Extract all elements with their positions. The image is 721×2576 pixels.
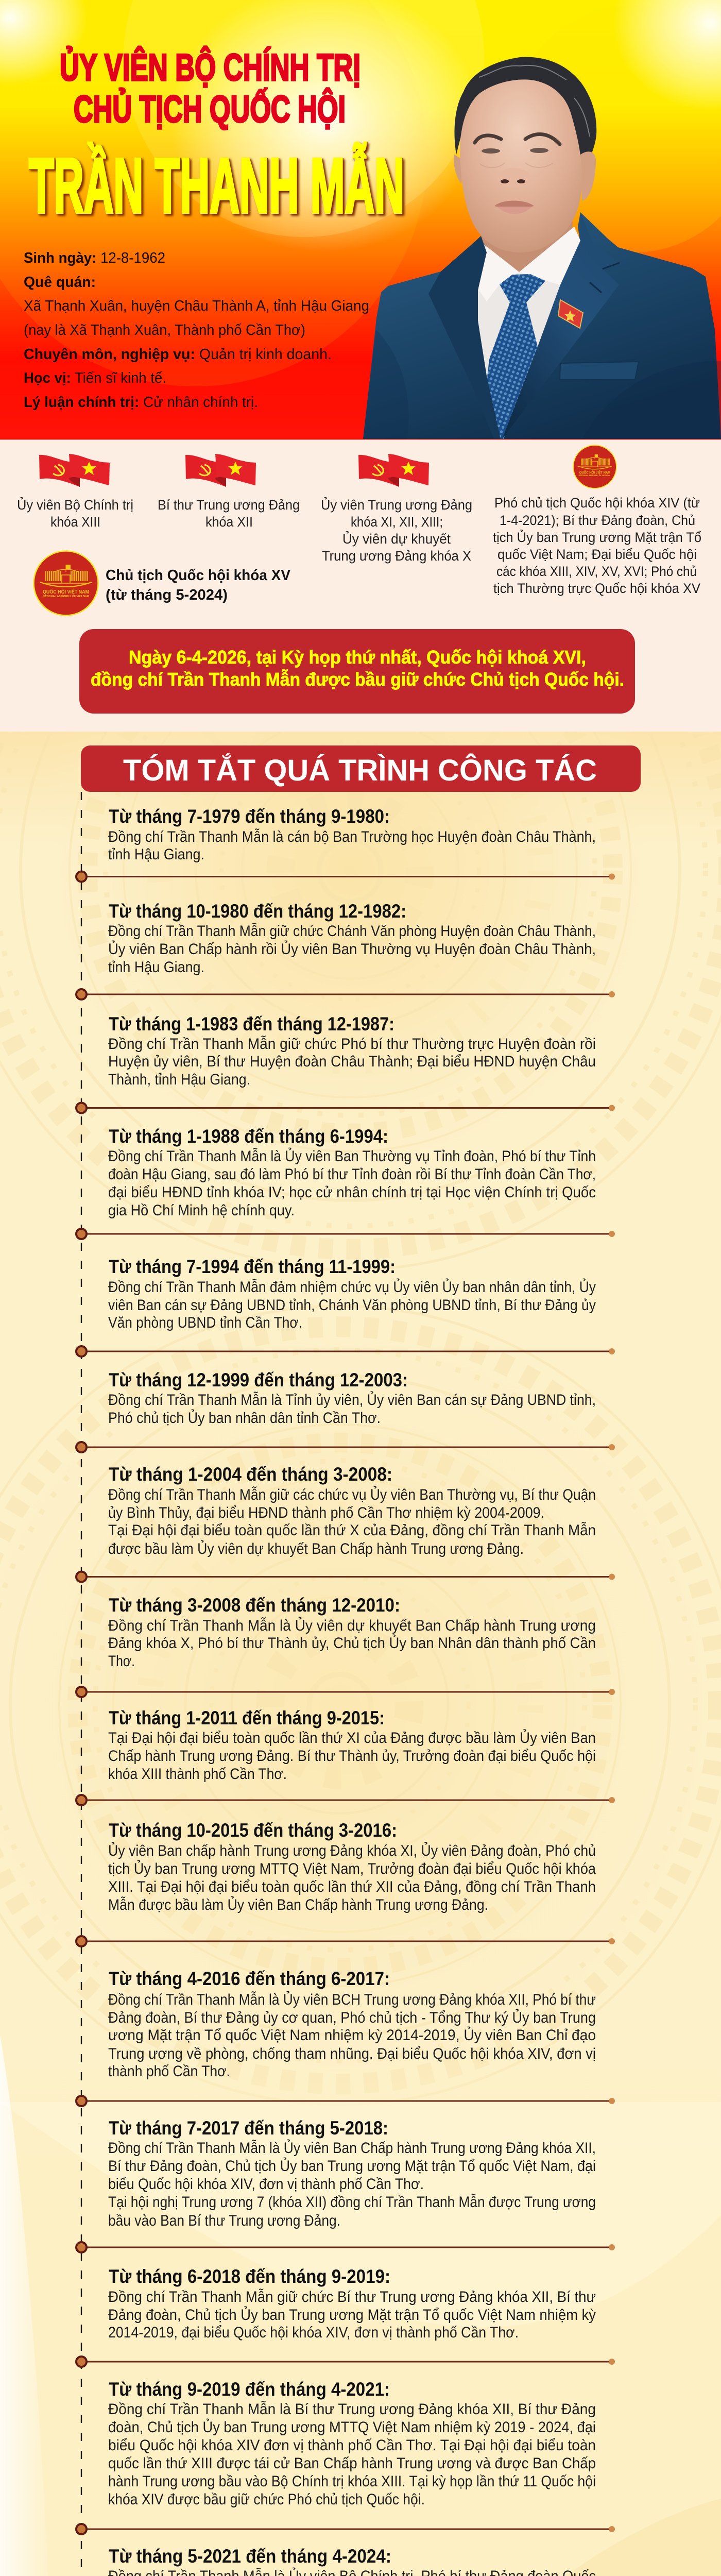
timeline entry: 12-1999 to 12-2003 xyxy=(108,1369,596,1427)
timeline entry: 7-1994 to 11-1999: Đồng chí Trần Thanh Mẫn đảm nhiệm chức vụ Ủy viên Ủy ban nhân dân tỉnh, Ủy xyxy=(108,1278,596,1296)
label: khóa XI, XII, XIII; xyxy=(351,514,443,530)
timeline entry: 9-2019 to 4-2021 xyxy=(108,2379,596,2508)
label: Ủy viên Trung ương Đảng xyxy=(321,496,472,513)
text block: personal details: Sinh ngày: 12-8-1962 xyxy=(24,250,165,266)
label: Trung ương Đảng khóa X xyxy=(322,548,471,564)
portrait: shirt xyxy=(478,227,580,439)
timeline entry: 10-1980 to 12-1982: tỉnh Hậu Giang. xyxy=(108,959,204,976)
timeline entry: 10-2015 to 3-2016: Mẫn được bầu làm Ủy viên Ban Chấp hành Trung ương Đảng. xyxy=(108,1896,488,1913)
timeline entry: 1-1983 to 12-1987: Đồng chí Trần Thanh Mẫn giữ chức Phó bí thư Thường trực Huyện đoàn rồi xyxy=(108,1036,596,1053)
timeline entry: 4-2016 to 6-2017: Đảng đoàn, Bí thư Đảng ủy cơ quan, Phó chủ tịch - Tổng Thư ký Ủy ban Trung xyxy=(108,2009,596,2026)
timeline entry: 4-2016 to 6-2017: ương Mặt trận Tổ quốc Việt Nam nhiệm kỳ 2014-2019, Ủy viên Ban Chỉ đạo xyxy=(108,2026,596,2044)
timeline entry: 4-2016 to 6-2017: Từ tháng 4-2016 đến tháng 6-2017: xyxy=(109,1968,390,1989)
label: tịch Thường trực Quốc hội khóa XV xyxy=(493,581,700,596)
timeline entry: 10-1980 to 12-1982 xyxy=(108,901,596,976)
timeline entry: 7-1979 to 9-1980: Đồng chí Trần Thanh Mẫn là cán bộ Ban Trường học Huyện đoàn Châu Thành, xyxy=(108,828,596,845)
timeline entry: 3-2008 to 12-2010: Đảng khóa X, Phó bí thư Thành ủy, Chủ tịch Ủy ban Nhân dân thành phố Cần xyxy=(108,1634,596,1652)
timeline entry: 10-2015 to 3-2016: Ủy viên Ban chấp hành Trung ương Đảng khóa XI, Ủy viên Đảng đoàn, Phó chủ xyxy=(108,1842,596,1859)
timeline entry: 9-2019 to 4-2021: Từ tháng 9-2019 đến tháng 4-2021: xyxy=(109,2379,390,2400)
timeline entry: 6-2018 to 9-2019: Từ tháng 6-2018 đến tháng 9-2019: xyxy=(109,2266,390,2287)
timeline entry: 3-2008 to 12-2010: Đồng chí Trần Thanh Mẫn là Ủy viên dự khuyết Ban Chấp hành Trung ương xyxy=(108,1617,596,1634)
timeline entry: 1-2004 to 3-2008: ủy Bình Thủy, đại biểu HĐND thành phố Cần Thơ nhiệm kỳ 2004-2009. xyxy=(108,1504,544,1521)
timeline marker xyxy=(76,1936,615,1946)
heading band: career summary: TÓM TẮT QUÁ TRÌNH CÔNG TÁC xyxy=(123,754,597,787)
label: Ủy viên Bộ Chính trị xyxy=(17,496,133,513)
timeline entry: 1-1988 to 6-1994 xyxy=(108,1126,596,1219)
label: khóa XIII xyxy=(50,514,100,530)
timeline entry: 10-1980 to 12-1982: Đồng chí Trần Thanh Mẫn giữ chức Chánh Văn phòng Huyện đoàn Châu Thành, xyxy=(108,923,596,940)
label: Ủy viên dự khuyết xyxy=(342,530,451,547)
timeline entry: 1-1983 to 12-1987 xyxy=(108,1013,596,1088)
timeline marker xyxy=(76,1795,615,1805)
timeline entry: 1-2004 to 3-2008: Đồng chí Trần Thanh Mẫn giữ các chức vụ Ủy viên Ban Thường vụ, Bí thư Quận xyxy=(108,1486,596,1503)
portrait: neck xyxy=(479,222,573,273)
timeline entry: 1-1983 to 12-1987: Từ tháng 1-1983 đến tháng 12-1987: xyxy=(109,1013,394,1035)
timeline marker xyxy=(76,2242,615,2252)
icon: party and national flags xyxy=(185,454,256,487)
text block: personal details: Quê quán: xyxy=(24,274,96,291)
timeline entry: 10-1980 to 12-1982: Từ tháng 10-1980 đến tháng 12-1982: xyxy=(109,901,406,922)
timeline marker xyxy=(76,2524,615,2534)
timeline entry: 12-1999 to 12-2003: Từ tháng 12-1999 đến tháng 12-2003: xyxy=(109,1369,408,1391)
timeline entry: 7-2017 to 5-2018: Tại hội nghị Trung ương 7 (khóa XII) đồng chí Trần Thanh Mẫn được Trung ương xyxy=(108,2194,596,2211)
label xyxy=(17,496,133,530)
icon: National Assembly emblem small xyxy=(573,445,616,488)
timeline marker xyxy=(76,1103,615,1113)
timeline entry: 7-1994 to 11-1999: viên Ban cán sự Đảng UBND tỉnh, Chánh Văn phòng UBND tỉnh, Bí thư Đảng ủy xyxy=(108,1297,596,1314)
item: National Assembly vice chairman xyxy=(493,445,701,596)
timeline entry: 9-2019 to 4-2021: đoàn, Chủ tịch Ủy ban Trung ương MTTQ Việt Nam nhiệm kỳ 2019 - 2024, đại xyxy=(108,2418,596,2436)
icon: National Assembly emblem large xyxy=(34,551,98,615)
item: Party Secretariat xyxy=(158,454,300,530)
timeline entry: 9-2019 to 4-2021: khóa XIV được bầu giữ chức Phó chủ tịch Quốc hội. xyxy=(108,2491,425,2508)
timeline entry: 5-2021 to 4-2024: Từ tháng 5-2021 đến tháng 4-2024: xyxy=(109,2546,391,2567)
timeline entry: 1-2011 to 9-2015: Chấp hành Trung ương Đảng. Bí thư Thành ủy, Trưởng đoàn đại biểu Quốc hội xyxy=(108,1748,596,1765)
timeline entry: 7-1994 to 11-1999 xyxy=(108,1256,596,1331)
portrait: tie xyxy=(487,274,545,439)
timeline entry: 9-2019 to 4-2021: Đồng chí Trần Thanh Mẫn là Bí thư Trung ương Đảng khóa XII, Bí thư Đảng xyxy=(108,2401,596,2418)
timeline entry: 1-1988 to 6-1994: Đồng chí Trần Thanh Mẫn là Ủy viên Ban Thường vụ Tỉnh đoàn, Phó bí thư Tỉnh xyxy=(108,1147,596,1165)
timeline entry: 1-2011 to 9-2015: Tại Đại hội đại biểu toàn quốc lần thứ XI của Đảng được bầu làm Ủy viên Ban xyxy=(108,1729,596,1747)
label xyxy=(106,567,291,603)
callout: election announcement: Ngày 6-4-2026, tại Kỳ họp thứ nhất, Quốc hội khoá XVI, xyxy=(129,647,586,668)
timeline entry: 7-2017 to 5-2018: Từ tháng 7-2017 đến tháng 5-2018: xyxy=(109,2117,388,2139)
timeline entry: 1-2011 to 9-2015 xyxy=(108,1707,596,1783)
item: Politburo member xyxy=(17,454,133,530)
timeline entry: 1-1988 to 6-1994: gia Hồ Chí Minh hệ chính quy. xyxy=(108,1202,295,1219)
timeline entry: 7-2017 to 5-2018: biểu Quốc hội khóa XIV, đơn vị thành phố Cần Thơ. xyxy=(108,2176,424,2193)
label: Bí thư Trung ương Đảng xyxy=(158,497,300,513)
label: (từ tháng 5-2024) xyxy=(106,587,228,603)
timeline entry: 6-2018 to 9-2019 xyxy=(108,2266,596,2341)
label: tịch Ủy ban Trung ương Mặt trận Tổ xyxy=(493,529,701,545)
text block: personal details: Xã Thạnh Xuân, huyện Châu Thành A, tỉnh Hậu Giang xyxy=(24,298,369,314)
timeline entry: 4-2016 to 6-2017 xyxy=(108,1968,596,2080)
text block: personal details: Học vị: Tiến sĩ kinh tế. xyxy=(24,370,166,386)
timeline entry: 12-1999 to 12-2003: Đồng chí Trần Thanh Mẫn là Tỉnh ủy viên, Ủy viên Ban cán sự Đảng UBND tỉnh, xyxy=(108,1391,596,1409)
icon: party and national flags xyxy=(39,454,110,487)
timeline entry: 4-2016 to 6-2017: Trung ương về phòng, chống tham nhũng. Đại biểu Quốc hội khóa XIV, đơn vị xyxy=(108,2045,596,2062)
timeline entry: 6-2018 to 9-2019: Đảng đoàn, Chủ tịch Ủy ban Trung ương Mặt trận Tổ quốc Việt Nam nhiệm kỳ xyxy=(108,2306,596,2324)
timeline entry: 1-2004 to 3-2008: được bầu làm Ủy viên dự khuyết Ban Chấp hành Trung ương Đảng. xyxy=(108,1540,524,1557)
timeline entry: 1-2004 to 3-2008 xyxy=(108,1464,596,1557)
text block: personal details: Chuyên môn, nghiệp vụ: Quản trị kinh doanh. xyxy=(24,346,332,363)
timeline marker xyxy=(76,2096,615,2106)
panel: hero header xyxy=(0,0,721,440)
timeline marker xyxy=(76,1229,615,1239)
timeline entry: 3-2008 to 12-2010: Từ tháng 3-2008 đến tháng 12-2010: xyxy=(109,1595,400,1616)
heading: position title xyxy=(60,47,360,130)
timeline entry: 10-1980 to 12-1982: Ủy viên Ban Chấp hành rồi Ủy viên Ban Thường vụ Huyện đoàn Châu Thành, xyxy=(108,940,596,958)
text block: personal details: Lý luận chính trị: Cử nhân chính trị. xyxy=(24,394,258,411)
timeline entry: 3-2008 to 12-2010: Thơ. xyxy=(108,1653,135,1670)
timeline entry: 9-2019 to 4-2021: biểu Quốc hội khóa XIV đơn vị thành phố Cần Thơ. Tại Đại hội đại biểu toàn xyxy=(108,2437,596,2454)
timeline entry: 1-1988 to 6-1994: Từ tháng 1-1988 đến tháng 6-1994: xyxy=(109,1126,388,1147)
heading: name: TRẦN THANH MẪN xyxy=(29,142,404,229)
heading band: career summary xyxy=(81,745,641,792)
portrait: head xyxy=(454,57,596,252)
heading: position title: CHỦ TỊCH QUỐC HỘI xyxy=(74,88,346,130)
timeline entry: 4-2016 to 6-2017: Đồng chí Trần Thanh Mẫn là Ủy viên BCH Trung ương Đảng khóa XII, Phó bí thư xyxy=(108,1991,596,2008)
timeline entry: 1-2011 to 9-2015: khóa XIII thành phố Cần Thơ. xyxy=(108,1766,287,1783)
timeline entry: 10-2015 to 3-2016: XIII. Tại Đại hội đại biểu toàn quốc lần thứ XII của Đảng, đồng chí Trần Thanh xyxy=(108,1878,596,1895)
timeline entry: 3-2008 to 12-2010 xyxy=(108,1595,596,1670)
timeline entry: 5-2021 to 4-2024 xyxy=(108,2546,596,2576)
timeline marker xyxy=(76,1442,615,1452)
callout: election announcement xyxy=(79,629,635,714)
portrait: breast pocket xyxy=(560,362,639,380)
timeline entry: 7-2017 to 5-2018: bầu vào Ban Bí thư Trung ương Đảng. xyxy=(108,2212,340,2229)
label: khóa XII xyxy=(205,514,253,530)
panel: positions held xyxy=(0,440,721,732)
timeline entry: 10-2015 to 3-2016: Từ tháng 10-2015 đến tháng 3-2016: xyxy=(109,1820,397,1841)
label xyxy=(493,495,701,596)
timeline marker xyxy=(76,1687,615,1697)
label: quốc Việt Nam; Đại biểu Quốc hội xyxy=(497,547,697,562)
timeline entry: 9-2019 to 4-2021: hành Trung ương bầu vào Bộ Chính trị khóa XIII. Tại kỳ họp lần thứ 11 Quốc hội xyxy=(108,2473,596,2490)
timeline entry: 12-1999 to 12-2003: Phó chủ tịch Ủy ban nhân dân tỉnh Cần Thơ. xyxy=(108,1409,381,1427)
timeline marker xyxy=(76,872,615,882)
timeline entry: 1-2004 to 3-2008: Từ tháng 1-2004 đến tháng 3-2008: xyxy=(109,1464,392,1485)
timeline spine xyxy=(81,792,82,2576)
portrait: collar xyxy=(479,227,580,301)
portrait xyxy=(363,57,721,439)
text block: personal details: (nay là Xã Thạnh Xuân, Thành phố Cần Thơ) xyxy=(24,322,305,338)
timeline entry: 9-2019 to 4-2021: quốc lần thứ XIII được tái cử Ban Chấp hành Trung ương và được Ban Chấp xyxy=(108,2455,596,2472)
timeline entry: 7-1979 to 9-1980 xyxy=(108,806,596,863)
timeline entry: 1-2011 to 9-2015: Từ tháng 1-2011 đến tháng 9-2015: xyxy=(109,1707,385,1728)
timeline marker xyxy=(76,2357,615,2367)
label xyxy=(158,497,300,530)
text block: personal details xyxy=(24,250,369,411)
label xyxy=(321,496,472,564)
timeline entry: 7-2017 to 5-2018: Đồng chí Trần Thanh Mẫn là Ủy viên Ban Chấp hành Trung ương Đảng khóa XII, xyxy=(108,2139,596,2157)
panel: patterned background xyxy=(0,732,721,2576)
timeline entry: 6-2018 to 9-2019: Đồng chí Trần Thanh Mẫn giữ chức Bí thư Trung ương Đảng khóa XII, Bí thư xyxy=(108,2289,596,2306)
callout: election announcement: đồng chí Trần Thanh Mẫn được bầu giữ chức Chủ tịch Quốc hội. xyxy=(91,669,624,690)
timeline marker xyxy=(76,989,615,999)
label: 1-4-2021); Bí thư Đảng đoàn, Chủ xyxy=(500,513,695,528)
timeline entry: 4-2016 to 6-2017: thành phố Cần Thơ. xyxy=(108,2063,230,2080)
timeline entry: 10-2015 to 3-2016 xyxy=(108,1820,596,1913)
timeline entry: 1-1983 to 12-1987: Thành, tỉnh Hậu Giang. xyxy=(108,1071,250,1088)
timeline entry: 7-2017 to 5-2018: Bí thư Đảng đoàn, Chủ tịch Ủy ban Trung ương Mặt trận Tổ quốc Việt Nam, đại xyxy=(108,2157,596,2175)
timeline entry: 1-1983 to 12-1987: Huyện ủy viên, Bí thư Huyện đoàn Châu Thành; Đại biểu HĐND huyện Châu xyxy=(108,1053,596,1070)
portrait: lapel pin xyxy=(558,300,583,328)
portrait: lapels xyxy=(428,212,620,439)
timeline entry: 1-2004 to 3-2008: Tại Đại hội đại biểu toàn quốc lần thứ X của Đảng, đồng chí Trần Thanh Mẫn xyxy=(108,1522,596,1539)
timeline entry: 7-1994 to 11-1999: Từ tháng 7-1994 đến tháng 11-1999: xyxy=(109,1256,396,1277)
timeline entry: 7-1994 to 11-1999: Văn phòng UBND tỉnh Cần Thơ. xyxy=(108,1314,302,1331)
heading: position title: ỦY VIÊN BỘ CHÍNH TRỊ xyxy=(60,47,360,89)
item: Central Committee member xyxy=(321,454,472,564)
timeline entry: 7-1979 to 9-1980: tỉnh Hậu Giang. xyxy=(108,846,204,863)
item: National Assembly chairman xyxy=(34,551,291,615)
label: các khóa XIII, XIV, XV, XVI; Phó chủ xyxy=(496,564,697,579)
timeline entry: 1-1988 to 6-1994: đoàn Hậu Giang, sau đó làm Phó bí thư Tỉnh đoàn rồi Bí thư Tỉnh đoàn Cần Thơ, xyxy=(108,1166,596,1183)
timeline entry: 7-1979 to 9-1980: Từ tháng 7-1979 đến tháng 9-1980: xyxy=(109,806,390,827)
timeline marker xyxy=(76,1346,615,1357)
timeline entry: 10-2015 to 3-2016: tịch Ủy ban Trung ương MTTQ Việt Nam, Trưởng đoàn đại biểu Quốc hội khóa xyxy=(108,1860,596,1877)
icon: party and national flags xyxy=(358,454,429,487)
label: Chủ tịch Quốc hội khóa XV xyxy=(106,567,291,584)
timeline marker xyxy=(76,1571,615,1582)
timeline entry: 6-2018 to 9-2019: 2014-2019, đại biểu Quốc hội khóa XIV, đơn vị thành phố Cần Thơ. xyxy=(108,2324,519,2341)
label: Phó chủ tịch Quốc hội khóa XIV (từ xyxy=(494,495,700,511)
portrait: jacket xyxy=(363,212,721,439)
timeline entry: 7-2017 to 5-2018 xyxy=(108,2117,596,2229)
timeline entry: 1-1988 to 6-1994: đại biểu HĐND tỉnh khóa IV; học cử nhân chính trị tại Học viện Chính trị Quốc xyxy=(108,1184,596,1201)
